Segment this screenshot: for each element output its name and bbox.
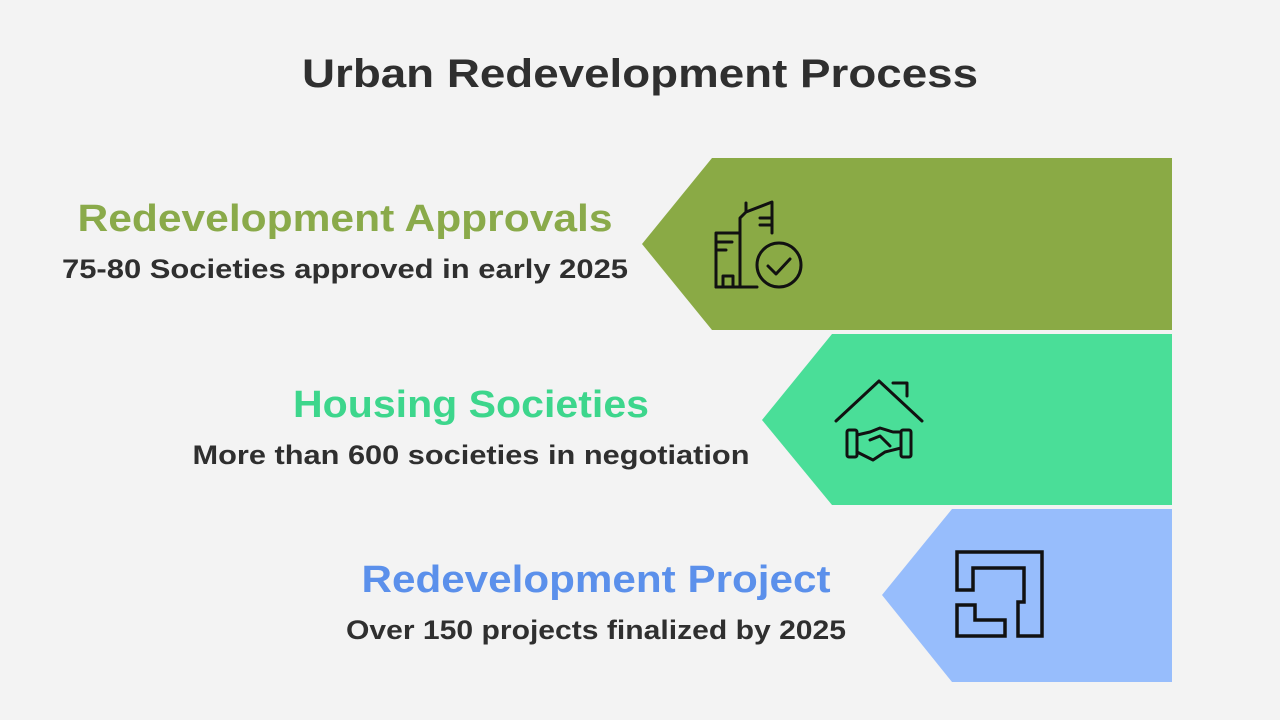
heading: project: Redevelopment Project: [362, 559, 831, 601]
title: Urban Redevelopment Process: [302, 52, 978, 96]
heading: approvals: Redevelopment Approvals: [78, 198, 612, 240]
heading: housing: Housing Societies: [293, 384, 649, 426]
text: housing detail: More than 600 societies in negotiation: [192, 440, 750, 470]
icon: floor plan: [957, 552, 1042, 636]
text: approvals detail: 75-80 Societies approved in early 2025: [62, 254, 628, 284]
panel: approvals arrow: [642, 158, 1172, 330]
icon: house with handshake: [836, 381, 922, 460]
panel: project arrow: [882, 509, 1172, 682]
panel: housing arrow: [762, 334, 1172, 505]
icon: building with check: [716, 202, 801, 287]
text: project detail: Over 150 projects finalized by 2025: [346, 615, 846, 645]
